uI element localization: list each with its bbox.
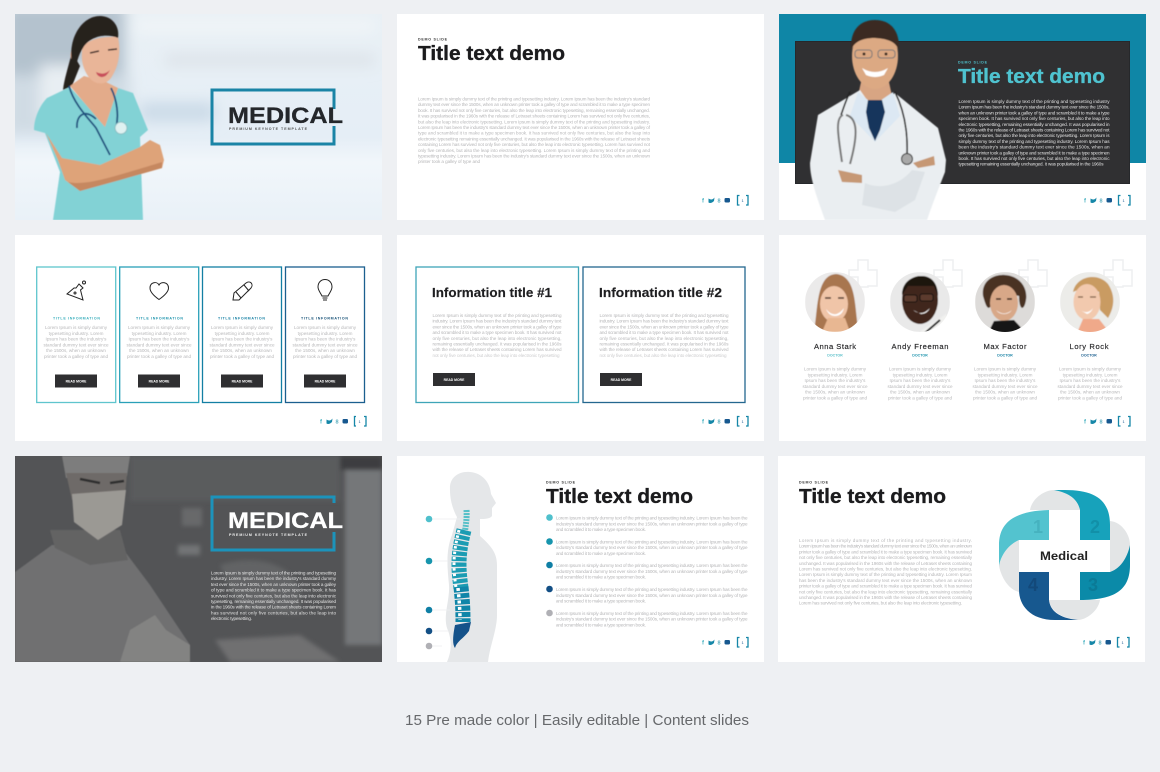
icon: light bulb [318,280,332,300]
card 3 [202,267,282,402]
panel: slide 8 spine diagram [397,456,764,662]
text block: only five centuries, but also the leap into electronic typesetting. Lorem Ipsum is [958,133,1110,138]
card: information title 1: not only five centuries, but also the leap into electronic typesetting [432,353,560,358]
card: information title 2: remaining essentially unchanged. It was popularised in the 1960s [600,342,729,346]
text block: Lorem Ipsum is simply dummy text of the printing and typesetting [211,570,336,576]
numbered list: and scrambled it to make a type specimen book. [556,551,646,556]
text block: printer took a galley of type and [418,159,480,164]
team labels and bios: Lorem Ipsum is simply dummy [1059,366,1122,372]
logo: MEDICAL frame: PREMIUM KEYNOTE TEMPLATE [229,127,308,131]
numbered list: industry's standard dummy text ever since the 1500s, when an unknown printer took a galley of type [556,593,748,598]
card 4: READ MORE [315,380,336,384]
panel: slide 1 cover with nurse [5,5,382,220]
text block: printer took a galley of type and scrambled it to make a type specimen book. It has survived [799,549,972,554]
text block: electronic typesetting. [211,616,252,621]
portrait: Max Factor [975,272,1035,333]
emblem: medical cross: 3 [1088,575,1098,595]
team labels and bios: standard dummy text ever since [887,384,953,389]
card: information title 2: not only five centuries, but also the leap into electronic typesetting [600,353,727,358]
spine markers [426,516,460,649]
team labels and bios: DOCTOR [1081,354,1097,358]
card: information title 1: with the release of Letraset sheets containing Lorem has survived [432,347,562,352]
footer: social icons and page number: 1 [742,198,744,203]
footer: social icons and page number: 8 [1098,640,1102,646]
card: information title 2: only five centuries, but also the leap into electronic typesetting, [600,336,728,341]
numbered list: Lorem Ipsum is simply dummy text of the printing and typesetting industry. Lorem Ipsum has been the [556,563,748,568]
text block: but also the leap into electronic typesetting. Lorem Ipsum is simply dummy text of the printing and typesetting industry. [418,119,650,124]
numbered list: and scrambled it to make a type specimen book. [556,599,646,604]
team labels and bios: Lorem Ipsum is simply dummy [889,366,952,372]
team labels and bios: printer took a galley of type and [1058,396,1122,400]
numbered list [546,514,748,627]
numbered list: industry's standard dummy text ever since the 1500s, when an unknown printer took a galley of type [556,569,748,574]
card: information title 2: industry. Lorem Ipsum has been the industry's standard dummy text [600,319,729,324]
footer: social icons and page number: 8 [1100,420,1103,426]
team labels and bios: Lorem Ipsum is simply dummy [974,366,1037,372]
panel: slide 7 dark surgeon cover [15,456,382,662]
card 3: standard dummy text ever since [209,342,275,347]
card 2: Lorem Ipsum is simply dummy [128,325,191,330]
text block: Lorem has survived not only five centuries, but also the leap into electronic typesetting. [799,566,972,572]
text block: Lorem Ipsum is simply dummy text of the printing and typesetting industry. [799,538,972,543]
portrait: Lory Rock [1060,272,1120,333]
text block: book. It has survived not only five centuries, but also the leap into electronic [958,156,1110,161]
text block: unchanged. It was popularised in the 1960s with the release of Letraset sheets containing [799,561,972,566]
card 1 [37,267,116,402]
numbered list: Lorem Ipsum is simply dummy text of the printing and typesetting industry. Lorem Ipsum has been the [556,611,748,616]
footer: social icons and page number: 8 [718,640,721,646]
card: information title 2: Information title #2 [599,286,722,300]
card: information title 2: ever since the 1500s, when an unknown printer took a galley of type [600,324,729,329]
card 1: printer took a galley of type and [44,354,108,359]
text block: the 1960s with the release of Letraset sheets containing Lorem has survived not [958,128,1110,132]
text block: typesetting remaining essentially unchanged. It was popularised in the 1960s [958,162,1104,167]
numbered list: Lorem Ipsum is simply dummy text of the printing and typesetting industry. Lorem Ipsum has been the [556,539,748,544]
card 2: READ MORE [149,380,170,384]
emblem: medical cross: Medical [1040,549,1088,563]
team labels and bios: the 1500s, when an unknown [805,390,865,395]
logo: MEDICAL frame: MEDICAL [228,103,343,128]
card 3: typesetting industry. Lorem [215,331,270,336]
card 3: Ipsum has been the industry's [212,337,273,342]
card 2: standard dummy text ever since [126,342,192,347]
team labels and bios: Max Factor [984,342,1027,351]
card 2: the 1500s, when an unknown [129,348,189,353]
card 2: Ipsum has been the industry's [129,337,190,342]
text block: Lorem has survived not only five centuries, but also the leap into electronic typesetting. [799,601,962,606]
team labels and bios: Ipsum has been the industry's [975,378,1036,383]
text block: It was popularised in the 1960s with the release of Letraset sheets containing Lorem has survived not only five centuries, [418,114,650,119]
card: information title 1 [416,267,578,402]
icon: flask [67,281,86,300]
panel: slide 4 four info cards [15,235,382,441]
footer: social icons and page number: f [702,640,705,646]
card 3: the 1500s, when an unknown [212,348,272,353]
text block: has survived not only five centuries, but also the leap into [211,610,336,615]
card 3: Lorem Ipsum is simply dummy [211,325,274,330]
silhouette [446,472,497,662]
footer: social icons and page number [1084,196,1130,205]
footer: social icons and page number: f [702,198,705,204]
card: information title 1: ever since the 1500s, when an unknown printer took a galley of type [432,324,562,329]
portrait: Andy Freeman [890,272,950,333]
heading: teal title [958,61,1104,84]
heading: title text demo: DEMO SLIDE [546,480,576,484]
nurse photo [34,16,164,220]
numbered list: industry's standard dummy text ever since the 1500s, when an unknown printer took a galley of type [556,521,748,526]
team labels and bios: printer took a galley of type and [888,396,952,400]
team labels and bios: Lorem Ipsum is simply dummy [804,366,867,372]
footer: social icons and page number [702,638,748,647]
footer: social icons and page number [320,416,366,426]
footer: social icons and page number [1083,638,1129,647]
card: information title 1: remaining essentially unchanged. It was popularised in the 1960s [432,342,562,346]
text block: survived not only five centuries, but also the leap into electronic [211,593,337,598]
card 4 [286,267,364,402]
team labels and bios: the 1500s, when an unknown [1060,390,1120,395]
card: information title 1: Information title #1 [432,286,552,300]
card: information title 1: Lorem Ipsum is simply dummy text of the printing and typesetting [432,313,562,318]
text block: specimen book. It has survived not only five centuries, but also the leap into [958,116,1110,121]
card 4: Lorem Ipsum is simply dummy [294,325,357,330]
footer: social icons and page number: f [1084,420,1087,426]
card: information title 2: READ MORE [611,378,632,382]
text block [958,99,1110,167]
footer: social icons and page number [1084,416,1130,426]
footer: social icons and page number: 8 [336,420,339,426]
surgeon photo [15,456,382,662]
text block: printer took a galley of type and scrambled it to make a type specimen book. It has survived [799,584,972,589]
numbered list: and scrambled it to make a type specimen book. [556,575,646,580]
team labels and bios: standard dummy text ever since [802,384,868,389]
card 4: standard dummy text ever since [292,342,358,347]
text block: book. It has survived not only five centuries, but also the leap into electronic typesetting, remaining essentially unchanged. [418,108,650,113]
team labels and bios: Ipsum has been the industry's [890,378,951,383]
footer: social icons and page number: 1 [358,419,362,424]
text block: Lorem Ipsum has been the industry's standard dummy text ever since the 1500s, when an unknown [799,544,972,549]
text block: typesetting, remaining essentially unchanged. It was popularised [211,599,336,604]
emblem: medical cross [999,490,1130,620]
team labels and bios: typesetting industry. Lorem [893,372,948,377]
card 1: Lorem Ipsum is simply dummy [45,325,108,330]
card: information title 2: and scrambled it to make a type specimen book. It has survived not [600,330,729,335]
caption: 15 Pre made color | Easily editable | Content slides [405,713,749,729]
card 4: printer took a galley of type and [293,354,357,359]
card: information title 1: READ MORE [444,378,465,382]
icon: heart [150,283,168,300]
card 1: standard dummy text ever since [43,342,109,347]
footer: social icons and page number: 1 [1122,419,1126,424]
text block: when an unknown printer took a galley of type and scrambled it to make a type [958,110,1110,115]
text block: of type and scrambled it to make a type specimen book. It has [211,588,337,593]
footer: social icons and page number: f [1083,640,1086,646]
team labels and bios: typesetting industry. Lorem [1063,372,1118,377]
heading: title text demo: DEMO SLIDE [799,480,829,484]
text block: been the industry's standard dummy text ever since the 1500s, when an [958,145,1110,150]
heading: title text demo: Title text demo [546,485,693,508]
team labels and bios: DOCTOR [827,354,843,358]
text block: typesetting industry. Lorem Ipsum has been the industry's standard dummy text ever since the 1500s, when an unknown [418,154,650,158]
team labels and bios: Lory Rock [1070,342,1109,351]
card: information title 1: and scrambled it to make a type specimen book. It has survived not [432,330,562,335]
logo: MEDICAL frame: MEDICAL [228,508,343,533]
text block: only five centuries, but also the leap into electronic typesetting. Lorem Ipsum is simply dummy text of the printing and [418,148,650,153]
footer: social icons and page number: 1 [742,419,744,424]
card: information title 2: Lorem Ipsum is simply dummy text of the printing and typesetting [600,313,729,318]
team labels and bios: standard dummy text ever since [1057,384,1123,389]
text block [799,538,973,606]
text block [418,96,651,164]
numbered list: Lorem Ipsum is simply dummy text of the printing and typesetting industry. Lorem Ipsum has been the [556,516,748,520]
team labels and bios: Anna Stark [814,342,856,351]
card 1: Ipsum has been the industry's [46,337,107,342]
heading: title text demo: Title text demo [799,485,946,508]
text block: Lorem Ipsum has been the industry's standard dummy text ever since the 1500s, [958,105,1110,110]
team labels and bios: printer took a galley of type and [803,396,867,400]
text block: industry. Lorem Ipsum has been the industry's standard dummy [211,576,337,581]
team labels and bios: Andy Freeman [892,342,948,351]
emblem: medical cross: 2 [1090,517,1100,537]
numbered list: and scrambled it to make a type specimen book. [556,622,646,627]
text block: containing Lorem has survived not only five centuries, but also the leap into electronic typesetting. Lorem has survived not [418,142,651,147]
card 1: the 1500s, when an unknown [46,348,106,353]
panel: slide 3 doctor on dark panel [779,14,1146,220]
footer: social icons and page number [702,196,748,205]
card 2: TITLE INFORMATION [136,316,183,320]
numbered list: and scrambled it to make a type specimen book. [556,527,646,532]
doctor photo [810,20,946,220]
footer: social icons and page number: f [1084,198,1087,204]
panel: slide 9 medical cross [778,456,1145,662]
footer: social icons and page number: 8 [1100,198,1103,204]
card 4: TITLE INFORMATION [301,316,348,320]
footer: social icons and page number: f [320,420,323,426]
card 2: printer took a galley of type and [127,354,191,359]
card: information title 1: only five centuries, but also the leap into electronic typesetting, [432,336,562,341]
card 2 [120,267,199,402]
footer: social icons and page number: 1 [1122,198,1126,203]
numbered list: industry's standard dummy text ever since the 1500s, when an unknown printer took a galley of type [556,545,748,550]
spine [453,510,471,648]
heading: title text demo: DEMO SLIDE [418,38,448,42]
team labels and bios [802,342,1123,400]
team labels and bios: the 1500s, when an unknown [890,390,950,395]
card 2: typesetting industry. Lorem [132,331,187,336]
team labels and bios: the 1500s, when an unknown [975,390,1035,395]
icon: pencil [233,282,252,300]
team labels and bios: Ipsum has been the industry's [1060,378,1121,383]
text block: Lorem Ipsum has been the industry's standard dummy text ever since the 1500s, when an unknown printer took a galley of [418,125,651,130]
team labels and bios: DOCTOR [912,354,928,358]
card 3: TITLE INFORMATION [218,316,265,320]
heading: title text demo: Title text demo [418,42,565,65]
card: information title 1: industry. Lorem Ipsum has been the industry's standard dummy text [432,319,562,324]
text block: has been the industry's standard dummy text ever since the 1500s, when an unknown [799,578,972,583]
team labels and bios: printer took a galley of type and [973,396,1037,400]
footer: social icons and page number: 1 [1122,640,1124,645]
card: information title 2 [583,267,745,402]
text block: type and scrambled it to make a type specimen book. It has survived not only five centuries, but also the leap into [418,131,650,136]
card 4: Ipsum has been the industry's [295,337,356,342]
logo: MEDICAL frame [212,90,343,144]
card 3: printer took a galley of type and [210,354,274,359]
team labels and bios: typesetting industry. Lorem [978,372,1033,377]
panel: slide 6 team of doctors [779,235,1146,441]
footer: social icons and page number: 1 [742,640,744,645]
panel: slide 5 two info cards [397,235,764,441]
footer: social icons and page number: 8 [718,198,721,204]
text block: Lorem Ipsum is simply dummy text of the printing and typesetting industry. Lorem Ipsum [799,572,972,577]
text block: unknown printer took a galley of type and scrambled it to make a type specimen [958,150,1110,155]
team labels and bios: Ipsum has been the industry's [805,378,866,383]
card 1: READ MORE [66,380,87,384]
text block: unchanged. It was popularised in the 1960s with the release of Letraset sheets containing [799,595,972,600]
text block: electronic typesetting, remaining essentially unchanged. It was popularised in [958,122,1110,127]
text block: electronic typesetting remaining essentially unchanged. It was popularised in the 1960s with the release of Letraset sheets [418,136,651,141]
footer: social icons and page number: 8 [718,420,721,426]
team labels and bios: standard dummy text ever since [972,384,1038,389]
footer: social icons and page number: f [702,420,705,426]
emblem: medical cross: 4 [1028,575,1038,595]
text block: simply dummy text of the printing and typesetting industry. Lorem Ipsum has [958,139,1110,144]
portrait: Anna Stark [805,272,865,332]
text block: dummy text ever since the 1500s, when an unknown printer took a galley of type and scrambled it to make a type specimen [418,102,650,107]
card: information title 2: with the release of Letraset sheets containing Lorem has survived [600,347,729,352]
footer: social icons and page number [702,416,748,426]
card 1: TITLE INFORMATION [53,316,100,320]
text block: Lorem Ipsum is simply dummy text of the printing and typesetting industry [958,99,1110,104]
text block: in the 1960s with the release of Letraset sheets containing Lorem [211,605,336,610]
heading: teal title: DEMO SLIDE [958,60,988,64]
logo: MEDICAL frame: PREMIUM KEYNOTE TEMPLATE [229,533,308,537]
card 4: the 1500s, when an unknown [295,348,355,353]
card 4: typesetting industry. Lorem [298,331,353,336]
text block: not only five centuries, but also the leap into electronic typesetting, remaining essentially [799,589,973,594]
card 3: READ MORE [232,380,253,384]
text block: Lorem Ipsum is simply dummy text of the printing and typesetting industry. Lorem Ipsum has been the industry's standard [418,96,650,102]
team labels and bios: typesetting industry. Lorem [808,372,863,377]
numbered list: Lorem Ipsum is simply dummy text of the printing and typesetting industry. Lorem Ipsum has been the [556,587,748,592]
team labels and bios: DOCTOR [997,354,1013,358]
logo: MEDICAL frame [212,497,343,550]
text block [211,570,337,621]
numbered list: industry's standard dummy text ever since the 1500s, when an unknown printer took a galley of type [556,617,748,622]
emblem: medical cross: 1 [1033,517,1043,537]
heading: teal title: Title text demo [958,65,1105,88]
heading: title text demo [546,481,692,504]
panel: slide 2 title and text [397,14,764,220]
text block: not only five centuries, but also the leap into electronic typesetting, remaining essentially [799,555,973,560]
text block: text ever since the 1500s, when an unknown printer took a galley [211,582,337,587]
card 1: typesetting industry. Lorem [49,331,104,336]
